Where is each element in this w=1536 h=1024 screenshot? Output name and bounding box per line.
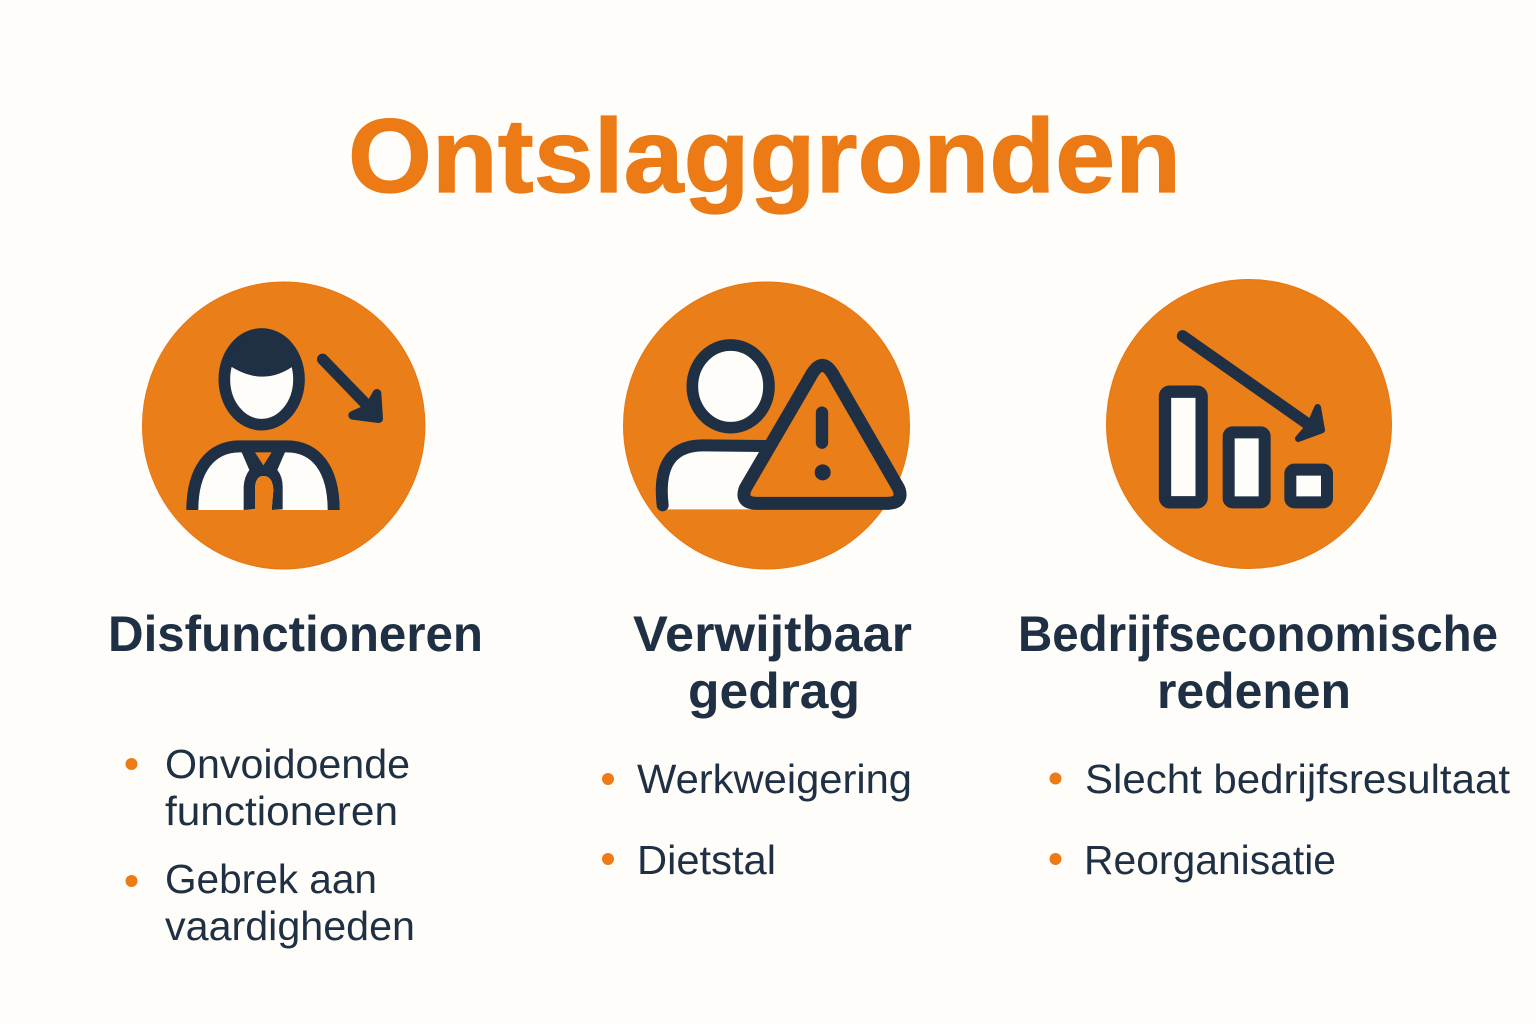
heading: Bedrijfseconomische [1018, 606, 1498, 662]
heading: redenen [1157, 663, 1351, 719]
heading: Disfunctioneren [108, 606, 483, 662]
panel: Verwijtbaar gedrag [602, 282, 912, 883]
bullet list: Dietstal [637, 837, 776, 883]
bullet list [126, 741, 415, 949]
heading: Verwijtbaar [633, 606, 912, 662]
bullet list: Werkweigering [637, 756, 912, 802]
panel: Disfunctioneren [108, 282, 483, 949]
bullet list: Onvoidoende [165, 741, 410, 787]
panel: Bedrijfseconomische redenen [1018, 280, 1511, 883]
heading: gedrag [688, 663, 860, 719]
bullet list [1050, 756, 1511, 883]
icon: employee with downward arrow [143, 282, 425, 569]
icon: person with warning triangle [624, 282, 910, 569]
icon: declining bar chart [1106, 280, 1392, 568]
bullet list [602, 756, 912, 883]
bullet list: vaardigheden [165, 903, 415, 949]
bullet list: Slecht bedrijfsresultaat [1085, 756, 1511, 802]
bullet list: Gebrek aan [165, 856, 377, 902]
heading [1018, 606, 1498, 719]
bullet list: Reorganisatie [1084, 837, 1336, 883]
title: Ontslaggronden [348, 98, 1181, 215]
bullet list: functioneren [165, 788, 398, 834]
heading [633, 606, 912, 719]
